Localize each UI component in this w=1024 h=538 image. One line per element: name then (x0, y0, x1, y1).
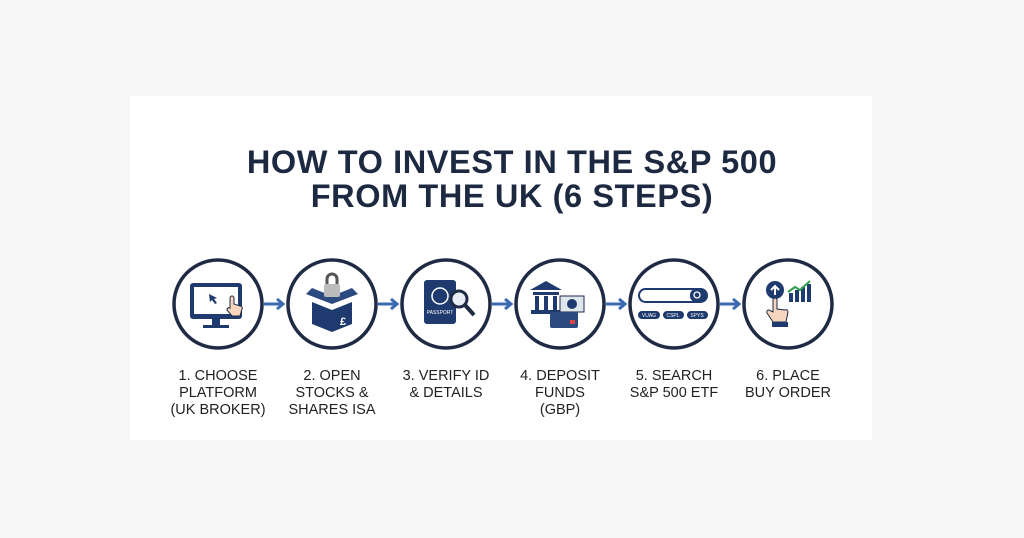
title: HOW TO INVEST IN THE S&P 500 (247, 144, 777, 180)
step 2 icon: box with lock (288, 260, 376, 348)
step 6 icon: buy button and chart (744, 260, 832, 348)
title: FROM THE UK (6 STEPS) (311, 178, 713, 214)
arrow 1 (264, 302, 283, 306)
step 1 icon: monitor (174, 260, 262, 348)
arrow 2 (378, 302, 397, 306)
step 5 icon: search bar: CSPL (666, 313, 680, 319)
label 2: 2. OPEN (303, 368, 361, 384)
label 5: S&P 500 ETF (630, 385, 718, 401)
step 5 icon: search bar: SPYS (690, 313, 704, 319)
title (247, 144, 777, 214)
label 2: SHARES ISA (288, 402, 376, 418)
step 3 icon: passport: PASSPORT (427, 310, 453, 316)
label 4: 4. DEPOSIT (520, 368, 600, 384)
label 6 (745, 368, 831, 401)
label 3: & DETAILS (409, 385, 483, 401)
arrow 5 (720, 302, 739, 306)
label 6: BUY ORDER (745, 385, 831, 401)
step 5 icon: search bar (630, 260, 718, 348)
label 2 (288, 368, 376, 418)
label 1 (170, 368, 266, 418)
step 3 icon: passport (402, 260, 490, 348)
arrow 4 (606, 302, 625, 306)
label 1: PLATFORM (179, 385, 257, 401)
arrow 3 (492, 302, 511, 306)
label 4: (GBP) (540, 402, 580, 418)
step 2 icon: box with lock: £ (340, 316, 346, 328)
step 4 icon: bank and card (516, 260, 604, 348)
label 3: 3. VERIFY ID (403, 368, 489, 384)
label 4: FUNDS (535, 385, 585, 401)
label 1: (UK BROKER) (170, 402, 266, 418)
label 5: 5. SEARCH (636, 368, 712, 384)
label 2: STOCKS & (295, 385, 369, 401)
label 5 (630, 368, 718, 401)
label 1: 1. CHOOSE (179, 368, 257, 384)
label 4 (520, 368, 600, 418)
label 3 (403, 368, 489, 401)
step 5 icon: search bar: VUAG (642, 313, 656, 319)
label 6: 6. PLACE (756, 368, 820, 384)
